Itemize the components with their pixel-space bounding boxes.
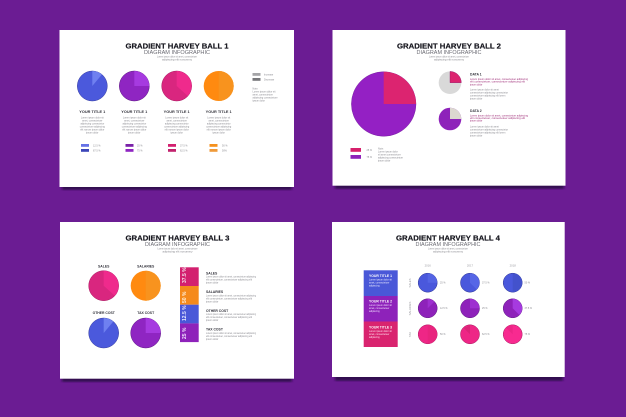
title block stack: Lorem ipsum dolor sit xyxy=(369,278,392,282)
column text 4: YOUR TITLE 1 xyxy=(206,110,232,114)
title 2: Lorem ipsum dolor sit amet, consectetuer xyxy=(429,56,469,58)
title 3: Lorem ipsum dolor sit amet, consectetuer xyxy=(158,248,198,250)
column text 3 xyxy=(164,110,190,134)
data 1 text: consectetuer adipiscing elit lorem xyxy=(470,95,505,98)
legend 2: Lorem ipsum dolor xyxy=(378,150,398,154)
data 2 text: consectetuer adipiscing elit lorem xyxy=(470,131,505,134)
title 4: DIAGRAM INFOGRAPHIC xyxy=(416,242,481,248)
ball: sales: SALES xyxy=(98,264,110,268)
title block stack xyxy=(364,270,398,347)
ball row: purple: 37.5 % xyxy=(524,307,533,310)
legend 2 xyxy=(350,148,403,162)
title block stack: adipiscing xyxy=(369,284,380,288)
legend swatches purple: 75 % xyxy=(137,150,143,152)
ball row: pink: 62.5 % xyxy=(482,333,490,336)
title block stack: adipiscing xyxy=(369,336,380,339)
title 4: adipiscing elit nonummy xyxy=(433,250,464,254)
column text 1: amet, consectetuer xyxy=(82,120,103,122)
column text 4: consectetuer adipiscing xyxy=(206,126,232,128)
column text 1: Lorem ipsum dolor sit xyxy=(81,116,104,120)
small pie 1 xyxy=(439,71,461,94)
title block stack: amet, consectetuer xyxy=(369,282,390,284)
row labels: SALARIES xyxy=(408,302,412,315)
column text 2: YOUR TITLE 1 xyxy=(121,110,147,114)
column text 1: adipiscing consectetur xyxy=(80,122,104,126)
ball: other cost: OTHER COST xyxy=(93,311,116,315)
side legend: Increase xyxy=(264,74,274,76)
title block stack: YOUR TITLE 1 xyxy=(369,274,392,278)
year labels: 2017 xyxy=(467,264,474,268)
side legend: adipiscing consectetuer xyxy=(252,96,278,100)
data 2 text: ipsum dolor xyxy=(470,134,483,137)
column text 3: amet, consectetuer xyxy=(167,120,187,122)
column text 3: elit nonum ipsum dolor xyxy=(165,128,189,132)
side legend: Note: xyxy=(252,88,259,90)
ball row: purple: 12.5 % xyxy=(440,307,448,310)
column text 4 xyxy=(206,110,232,134)
column text 1 xyxy=(79,110,105,134)
small pie 2 xyxy=(439,108,461,130)
year labels: 2018 xyxy=(510,264,516,268)
data 1 text: consectetuer adipiscing consectetur xyxy=(470,92,508,95)
ball row: blue: 50 % xyxy=(524,282,531,284)
title 4: Lorem ipsum dolor sit amet, consectetuer xyxy=(428,248,468,250)
title 3: DIAGRAM INFOGRAPHIC xyxy=(145,242,210,248)
legend swatches orange xyxy=(210,144,228,152)
ball: sales xyxy=(89,264,119,301)
ball: pink xyxy=(162,71,192,101)
column text 2: adipiscing consectetur xyxy=(122,122,146,126)
data 1 text xyxy=(470,72,529,101)
row labels xyxy=(408,278,412,337)
legend swatches pink: 62.5 % xyxy=(180,150,188,152)
ball row: pink: 75 % xyxy=(524,333,531,336)
ball: salaries: SALARIES xyxy=(137,264,155,268)
panel 3: gradient harvey ball 3 xyxy=(60,222,294,382)
legend swatches blue: 87.5 % xyxy=(93,150,101,152)
column text 2: elit nonum ipsum dolor xyxy=(122,128,147,132)
data 2 text: Lorem ipsum dolor sit amet, consectetuer adipiscing xyxy=(470,114,529,117)
column text 3: consectetuer adipiscing xyxy=(164,126,190,128)
big pie xyxy=(351,72,416,136)
title block stack: adipiscing xyxy=(369,310,380,313)
column text 3: YOUR TITLE 1 xyxy=(164,110,190,114)
data 2 text: consectetuer adipiscing consectetur xyxy=(470,128,508,131)
legend 2: adipiscing consectetuer xyxy=(378,156,403,160)
ball: orange xyxy=(204,71,234,101)
legend 2: 25 % xyxy=(366,149,373,152)
ball row: blue: 25 % xyxy=(440,282,446,284)
bar labels: ipsum dolor xyxy=(206,282,219,284)
ball row: purple xyxy=(418,299,533,318)
data 1 text: ipsum dolor xyxy=(470,83,483,86)
year labels xyxy=(425,264,516,268)
legend swatches pink xyxy=(168,144,188,152)
title 1 xyxy=(126,42,229,62)
title block stack: YOUR TITLE 2 xyxy=(369,300,392,304)
legend swatches blue xyxy=(81,144,101,152)
ball: blue xyxy=(77,71,107,101)
bar labels: SALARIES xyxy=(206,290,224,294)
ball: tax cost xyxy=(131,311,161,348)
column text 2 xyxy=(121,110,147,134)
column text 3: Lorem ipsum dolor sit xyxy=(165,116,188,120)
title block stack: YOUR TITLE 3 xyxy=(369,326,392,330)
stacked percentage bar xyxy=(180,267,199,342)
side legend xyxy=(252,73,278,102)
legend 2: sit amet consectetuer xyxy=(378,154,401,156)
column text 1: elit nonum ipsum dolor xyxy=(80,128,105,132)
side legend: Decrease xyxy=(264,78,275,82)
row labels: TAX xyxy=(408,332,412,337)
title 4: GRADIENT HARVEY BALL 4 xyxy=(396,234,500,242)
side legend: Lorem ipsum dolor sit xyxy=(252,90,276,94)
legend swatches purple: 25 % xyxy=(137,144,143,148)
stacked percentage bar: 25 % xyxy=(182,327,188,339)
bar labels: Lorem ipsum dolor sit amet, consectetuer adipiscing xyxy=(206,294,257,298)
title 4 xyxy=(396,234,500,254)
column text 2: amet, consectetuer xyxy=(124,120,145,122)
title block stack: amet, consectetuer xyxy=(369,307,390,310)
legend 2: Note: xyxy=(378,148,384,150)
bar labels: ipsum dolor xyxy=(206,300,219,304)
title 2: adipiscing elit nonummy xyxy=(434,58,465,62)
legend swatches pink: 37.5 % xyxy=(180,144,188,148)
column text 1: ipsum dolor xyxy=(86,132,99,134)
title 1: adipiscing elit nonummy xyxy=(162,58,193,62)
column text 2: ipsum dolor xyxy=(128,132,141,134)
title 2: DIAGRAM INFOGRAPHIC xyxy=(416,50,482,56)
panel 4: gradient harvey ball 4 xyxy=(332,222,565,381)
ball: purple xyxy=(119,71,149,101)
year labels: 2016 xyxy=(425,264,431,268)
data 2 text: elit consectetuer, consectetuer adipiscing elit xyxy=(470,117,525,120)
column text 4: amet, consectetuer xyxy=(209,120,229,122)
stacked percentage bar: 12.5 % xyxy=(182,305,188,321)
bar labels: ipsum dolor xyxy=(206,319,219,322)
bar labels: elit consectetuer, consectetuer adipiscing elit xyxy=(206,316,252,319)
column text 3: ipsum dolor xyxy=(171,132,183,134)
legend 2: 75 % xyxy=(366,156,373,159)
bar labels: TAX COST xyxy=(206,328,224,332)
panel 1: gradient harvey ball 1 xyxy=(60,30,294,190)
legend 2: ipsum dolor xyxy=(378,160,391,162)
column text 3: adipiscing consectetur xyxy=(165,122,189,126)
title 3: GRADIENT HARVEY BALL 3 xyxy=(126,234,230,242)
bar labels: ipsum dolor xyxy=(206,338,219,341)
bar labels: Lorem ipsum dolor sit amet, consectetuer adipiscing xyxy=(206,332,257,335)
ball row: blue: 37.5 % xyxy=(482,282,490,284)
legend swatches purple xyxy=(126,144,143,152)
bar labels: SALES xyxy=(206,272,218,276)
ball row: pink xyxy=(418,325,531,344)
column text 2: consectetuer adipiscing xyxy=(122,126,147,128)
data 1 text: Lorem ipsum dolor sit amet xyxy=(470,89,499,92)
legend swatches orange: 50% xyxy=(222,150,228,152)
column text 1: YOUR TITLE 1 xyxy=(79,110,105,114)
data 1 text: ipsum dolor xyxy=(470,98,483,101)
data 2 text: ipsum dolor xyxy=(470,120,483,123)
data 2 text: Lorem ipsum dolor sit amet xyxy=(470,125,499,128)
bar labels: Lorem ipsum dolor sit amet, consectetuer adipiscing xyxy=(206,313,257,316)
data 2 text xyxy=(470,109,529,137)
bar labels: elit consectetuer, consectetuer adipiscing elit xyxy=(206,335,252,338)
panel 2: gradient harvey ball 2 xyxy=(332,30,566,189)
column text 4: ipsum dolor xyxy=(213,132,225,134)
stacked percentage bar: 50 % xyxy=(182,291,188,303)
ball row: blue xyxy=(418,273,531,292)
legend swatches blue: 12.5 % xyxy=(93,144,101,148)
title 1: Lorem ipsum dolor sit amet, consectetuer xyxy=(157,56,197,58)
bar labels: elit consectetuer, consectetuer adipiscing elit xyxy=(206,298,252,300)
ball: tax cost: TAX COST xyxy=(137,311,155,315)
side legend: amet, consectetuer xyxy=(252,94,273,96)
column text 2: Lorem ipsum dolor sit xyxy=(123,116,146,120)
title 2 xyxy=(397,42,501,62)
side legend: ipsum dolor xyxy=(252,100,265,102)
bar labels xyxy=(206,272,257,341)
title block stack: Lorem ipsum dolor sit xyxy=(369,304,392,307)
data 1 text: DATA 1 xyxy=(470,72,482,76)
data 1 text: Lorem ipsum dolor sit amet, consectetuer adipiscing xyxy=(470,78,529,81)
title 3 xyxy=(126,234,230,254)
bar labels: OTHER COST xyxy=(206,309,229,313)
data 2 text: DATA 2 xyxy=(470,109,482,113)
bar labels: Lorem ipsum dolor sit amet, consectetuer adipiscing xyxy=(206,276,257,278)
ball: other cost xyxy=(89,311,119,348)
data 1 text: elit consectetuer, consectetuer adipiscing elit xyxy=(470,81,525,84)
title block stack: Lorem ipsum dolor sit xyxy=(369,330,392,333)
title 3: adipiscing elit nonummy xyxy=(162,250,193,254)
title block stack: amet, consectetuer xyxy=(369,333,390,336)
row labels: SALES xyxy=(408,278,412,288)
title 1: DIAGRAM INFOGRAPHIC xyxy=(144,50,210,56)
column text 4: elit nonum ipsum dolor xyxy=(207,128,231,132)
ball: salaries xyxy=(131,264,161,301)
column text 4: adipiscing consectetur xyxy=(207,122,231,126)
bar labels: elit consectetuer, consectetuer adipiscing elit xyxy=(206,278,252,282)
column text 4: Lorem ipsum dolor sit xyxy=(207,116,230,120)
title 1: GRADIENT HARVEY BALL 1 xyxy=(126,42,229,50)
column text 1: consectetuer adipiscing xyxy=(80,126,105,128)
ball row: purple: 25 % xyxy=(482,307,488,310)
title 2: GRADIENT HARVEY BALL 2 xyxy=(397,42,501,50)
ball row: pink: 50 % xyxy=(440,333,446,336)
legend swatches orange: 50 % xyxy=(222,144,228,148)
stacked percentage bar: 37.5 % xyxy=(182,267,188,283)
